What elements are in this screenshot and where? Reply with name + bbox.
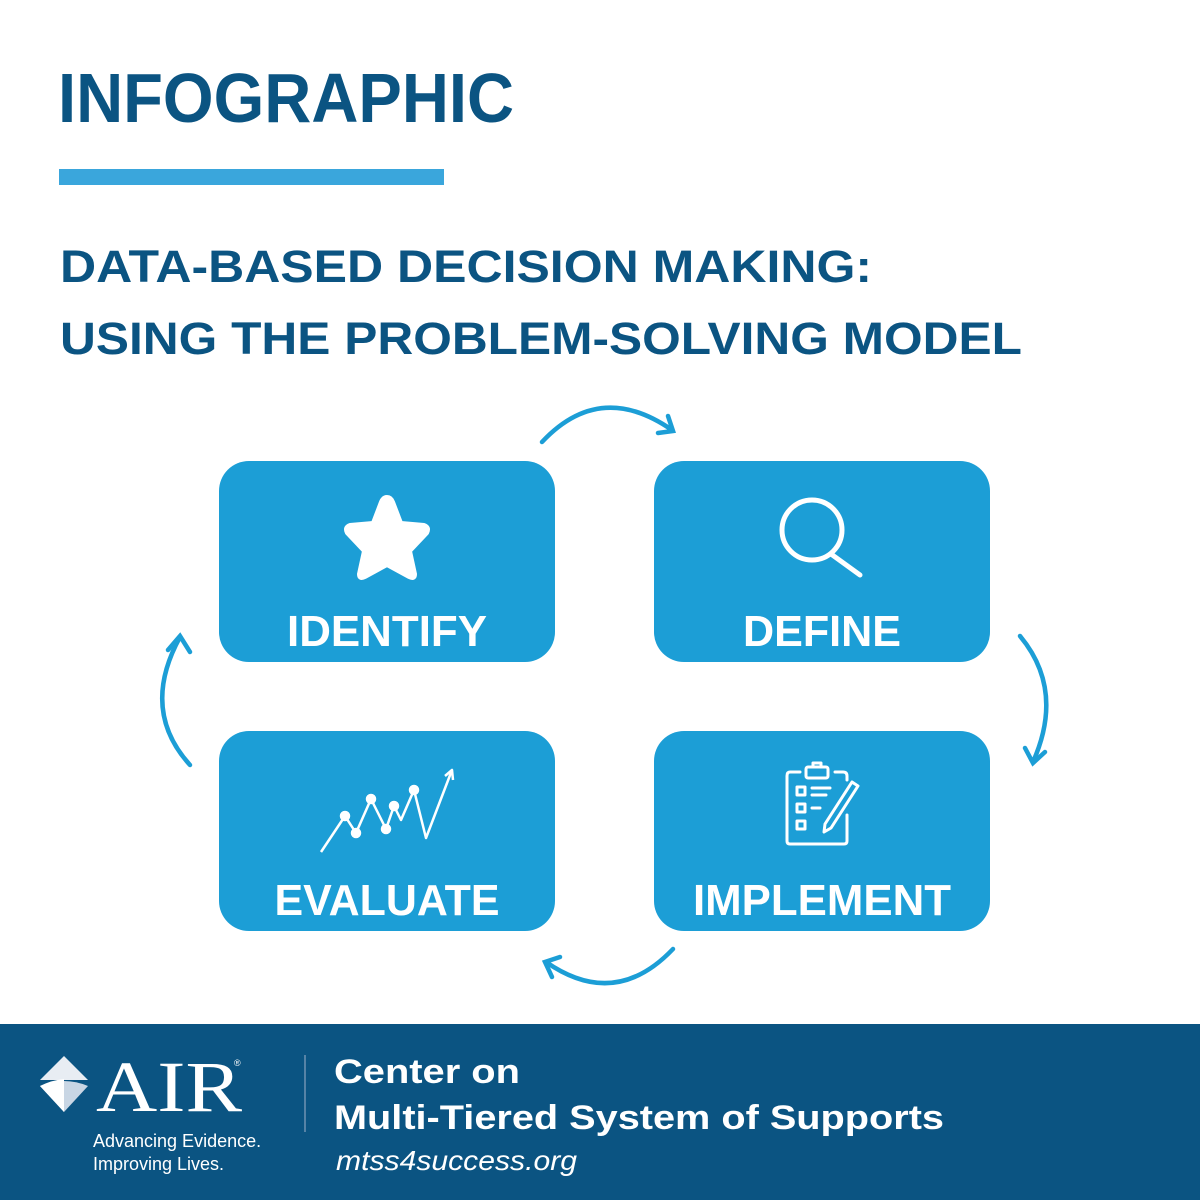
panel: define (654, 461, 990, 662)
logo: AIR: Advancing Evidence. (93, 1131, 261, 1151)
icon: clipboard (787, 763, 858, 844)
arrow: top (542, 408, 673, 442)
footer text: center: Multi-Tiered System of Supports (334, 1099, 944, 1137)
icon: line chart (321, 770, 453, 852)
logo: AIR: ® (234, 1058, 241, 1068)
icon: magnifier (782, 500, 860, 575)
subtitle: USING THE PROBLEM-SOLVING MODEL (60, 313, 1022, 364)
arrow: bottom (545, 949, 673, 983)
panel: identify: IDENTIFY (287, 607, 487, 656)
footer text: center: Center on (334, 1053, 520, 1091)
panel: identify (219, 461, 555, 662)
subtitle (60, 241, 1022, 364)
footer text: center: mtss4success.org (336, 1145, 577, 1176)
logo: AIR (40, 1047, 261, 1174)
panel: evaluate (219, 731, 555, 931)
subtitle: DATA-BASED DECISION MAKING: (60, 241, 872, 292)
panel: define: DEFINE (743, 607, 901, 656)
arrow: right (1020, 636, 1046, 763)
arrow: left (162, 636, 190, 765)
logo: AIR: Improving Lives. (93, 1154, 224, 1174)
title: INFOGRAPHIC (58, 59, 514, 137)
footer (0, 1024, 1200, 1200)
icon: star (346, 497, 428, 578)
panel: implement: IMPLEMENT (693, 876, 951, 925)
footer text: center (334, 1053, 944, 1176)
logo: AIR: AIR (96, 1047, 242, 1127)
panel: evaluate: EVALUATE (274, 876, 500, 925)
panel: implement (654, 731, 990, 931)
